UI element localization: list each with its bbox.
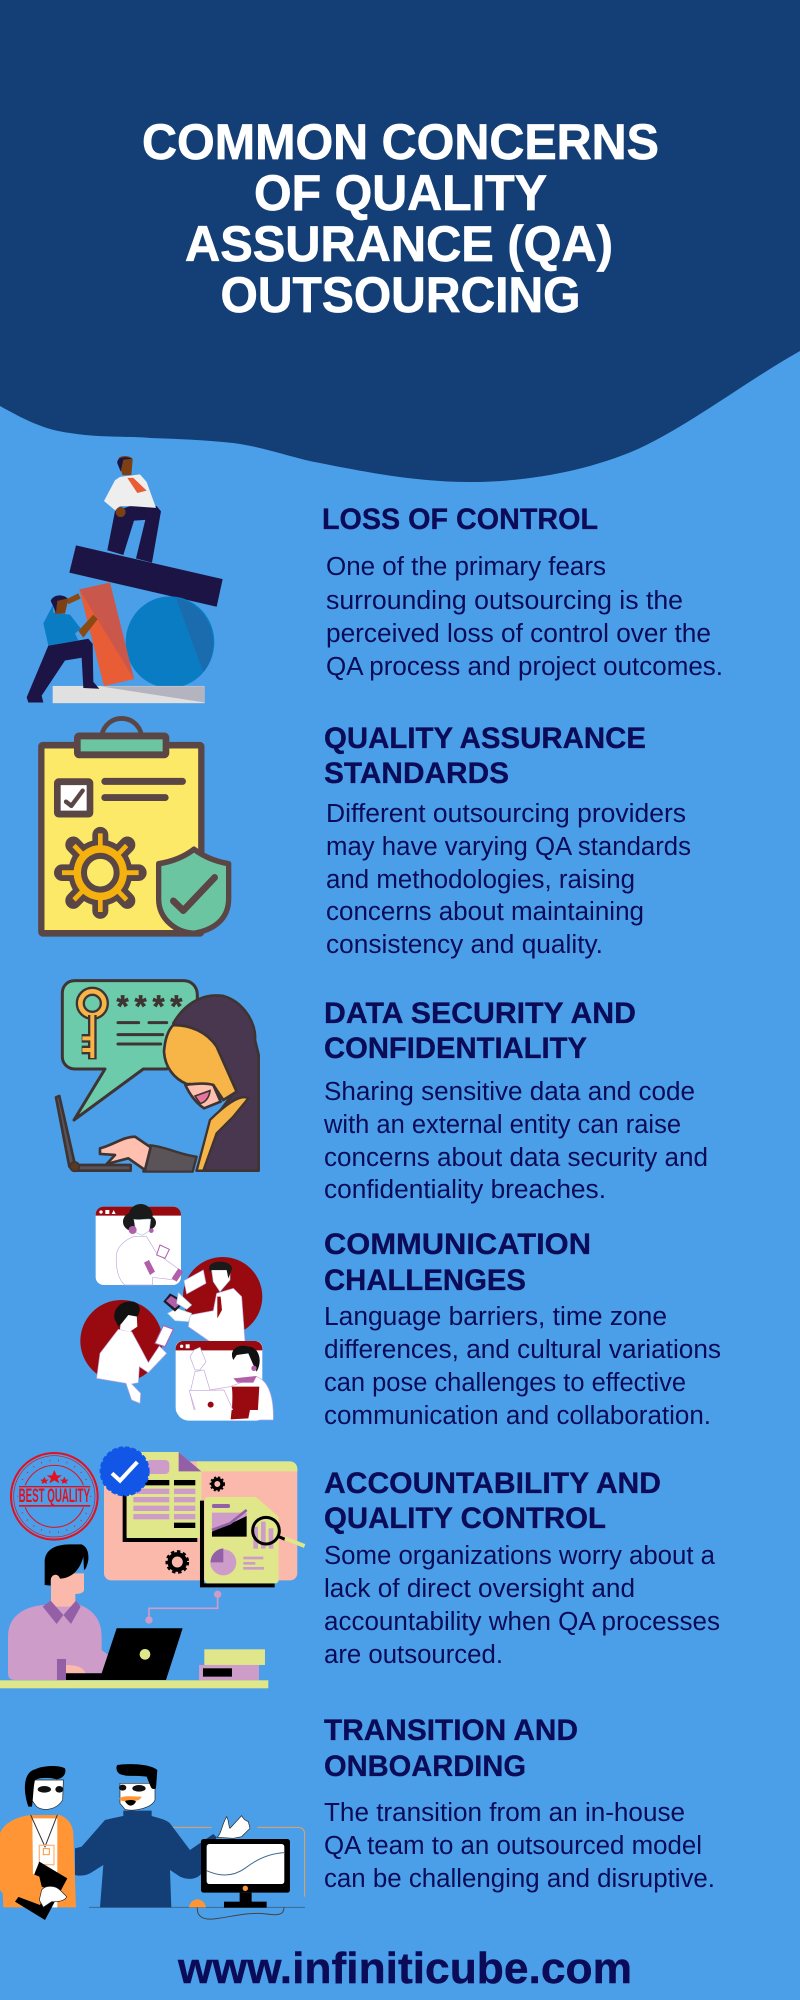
body text: Different outsourcing providers: [326, 800, 686, 828]
gear: [62, 833, 139, 912]
heading: LOSS OF CONTROL: [322, 503, 598, 536]
icon: hacker with password speech bubble: [56, 981, 259, 1172]
body text: confidentiality breaches.: [324, 1176, 606, 1204]
hooded body: [173, 995, 259, 1171]
orange outline: [172, 1827, 305, 1897]
clipboard board: [41, 745, 201, 933]
pink dashboard: [104, 1461, 297, 1580]
password asterisks: *: [135, 990, 147, 1024]
heading: CHALLENGES: [324, 1264, 526, 1297]
heading: [324, 1228, 591, 1297]
section: transition and onboarding: [324, 1714, 715, 1893]
heading: QUALITY CONTROL: [324, 1502, 606, 1535]
red circle right: [183, 1257, 262, 1336]
icon: loss of control balancing figures: [27, 456, 223, 703]
face: [185, 1083, 221, 1108]
body text: consistency and quality.: [326, 931, 603, 959]
desk line: [89, 1906, 305, 1909]
hand: [100, 1137, 151, 1170]
body text: may have varying QA standards: [326, 833, 691, 861]
body text: [326, 553, 723, 681]
body text: concerns about data security and: [324, 1144, 708, 1172]
red circle left: [80, 1300, 162, 1382]
body text: can be challenging and disruptive.: [324, 1865, 715, 1893]
body text: can pose challenges to effective: [324, 1369, 686, 1397]
clip: [77, 718, 166, 755]
heading: QUALITY ASSURANCE: [324, 722, 646, 755]
body text: [324, 1542, 720, 1669]
ground wedge: [53, 686, 205, 703]
person at laptop: [8, 1544, 108, 1680]
connector line: [145, 1591, 221, 1624]
section: communication challenges: [324, 1228, 721, 1430]
section: quality assurance standards: [324, 722, 691, 959]
sleeve: [143, 1145, 197, 1172]
ball: [126, 596, 214, 688]
document right: [200, 1497, 279, 1587]
scarf: [197, 1097, 248, 1171]
section: loss of control: [322, 503, 723, 681]
document left: [123, 1452, 201, 1542]
top woman: [116, 1204, 183, 1285]
header wave panel: [0, 0, 800, 482]
face mask: [164, 1025, 237, 1100]
title: OF QUALITY: [254, 165, 547, 221]
body text: [324, 1303, 721, 1430]
magnifier: [253, 1517, 305, 1546]
heading: [324, 1467, 661, 1535]
books: [199, 1649, 265, 1680]
heading: STANDARDS: [324, 757, 509, 790]
password asterisks: [117, 990, 182, 1024]
heading: ONBOARDING: [324, 1750, 526, 1783]
window top: [96, 1207, 181, 1285]
heading: CONFIDENTIALITY: [324, 1032, 587, 1065]
best quality stamp: BEST QUALITY: [19, 1486, 90, 1507]
icon: two colleagues at monitor: [0, 1764, 305, 1920]
title: COMMON CONCERNS: [142, 114, 659, 170]
left man: [97, 1301, 173, 1403]
checkbox: [57, 782, 90, 814]
monitor: [201, 1839, 290, 1908]
password asterisks: *: [117, 990, 129, 1024]
red block: [79, 583, 134, 686]
section: accountability and quality control: [324, 1467, 720, 1669]
text lines: [105, 781, 183, 798]
password asterisks: *: [170, 990, 182, 1024]
heading: [324, 722, 646, 790]
window bottom: [176, 1341, 262, 1414]
body text: lack of direct oversight and: [324, 1575, 635, 1603]
body text: QA team to an outsourced model: [324, 1832, 702, 1860]
left man: [0, 1766, 76, 1920]
bubble lines: [118, 1023, 167, 1044]
heading: ACCOUNTABILITY AND: [324, 1467, 661, 1500]
icon: window bottom edge with laptop: [176, 1410, 273, 1421]
body text: [326, 800, 691, 959]
icon: clipboard with gear and shield: [41, 718, 229, 933]
desk: [0, 1680, 268, 1688]
website url: www.infiniticube.com: [177, 1944, 632, 1993]
bottom woman: [189, 1346, 273, 1420]
mouth: [195, 1091, 210, 1103]
body text: One of the primary fears: [326, 553, 606, 581]
icon: accountability and quality control scene: [0, 1447, 305, 1688]
mouse and cable: [189, 1899, 284, 1919]
kneeling man: [27, 593, 99, 702]
body text: and methodologies, raising: [326, 866, 635, 894]
middle man: [75, 1764, 250, 1907]
standing man: [104, 456, 161, 563]
body text: accountability when QA processes: [324, 1608, 720, 1636]
section: data security and confidentiality: [323, 997, 708, 1204]
body text: perceived loss of control over the: [326, 620, 711, 648]
body text: differences, and cultural variations: [324, 1336, 721, 1364]
right man: [163, 1262, 245, 1342]
best quality stamp: [11, 1453, 98, 1540]
heading: DATA SECURITY AND: [324, 997, 636, 1030]
body text: concerns about maintaining: [326, 898, 644, 926]
body text: The transition from an in-house: [324, 1799, 685, 1827]
body text: communication and collaboration.: [324, 1402, 711, 1430]
password asterisks: *: [153, 990, 165, 1024]
body text: Some organizations worry about a: [324, 1542, 716, 1570]
verified badge: [101, 1447, 149, 1495]
heading: [324, 1714, 578, 1783]
icon: communication challenges people: [80, 1204, 273, 1420]
title: ASSURANCE (QA): [185, 216, 613, 272]
heading: TRANSITION AND: [324, 1714, 578, 1747]
title: OUTSOURCING: [220, 267, 580, 323]
laptop: [66, 1628, 183, 1680]
speech bubble: [62, 981, 197, 1120]
body text: [324, 1799, 715, 1893]
plank: [69, 545, 223, 607]
heading: [324, 997, 636, 1065]
body text: with an external entity can raise: [323, 1111, 681, 1139]
body text: surrounding outsourcing is the: [326, 587, 683, 615]
small gears: [167, 1477, 224, 1572]
body text: Language barriers, time zone: [324, 1303, 667, 1331]
heading: COMMUNICATION: [324, 1228, 591, 1261]
body text: Sharing sensitive data and code: [324, 1078, 695, 1106]
title: [142, 114, 659, 323]
key: [80, 991, 104, 1059]
body text: [323, 1078, 708, 1204]
body text: QA process and project outcomes.: [326, 653, 723, 681]
body text: are outsourced.: [324, 1641, 503, 1669]
shield: [159, 849, 229, 933]
laptop: [56, 1096, 131, 1171]
